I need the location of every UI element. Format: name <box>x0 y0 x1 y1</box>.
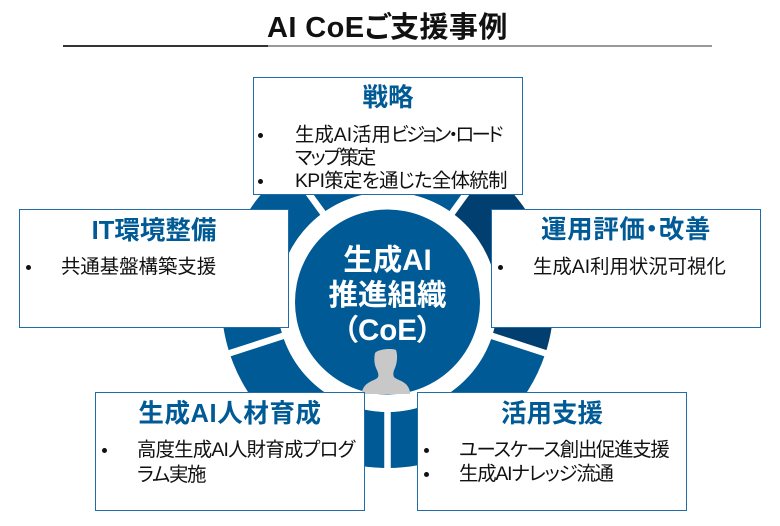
panel: IT environment <box>19 209 289 328</box>
title rule <box>63 45 712 46</box>
heading: strategy: 戦略 <box>362 84 414 112</box>
ring: dark segment <box>388 168 554 353</box>
bullet list: operations: 生成AI利用状況可視化 <box>533 256 726 278</box>
center circle <box>295 210 480 394</box>
title: AI CoEご支援事例 <box>267 12 508 44</box>
center label: （CoE） <box>343 314 432 347</box>
bullet list: utilization: ユースケース創出促進支援 <box>459 439 669 461</box>
heading: operations: 運用評価・改善 <box>541 216 711 244</box>
bullet list: utilization <box>424 439 670 485</box>
center label: 推進組織 <box>328 279 446 312</box>
bullet list: utilization: 生成AIナレッジ流通 <box>459 463 613 485</box>
heading: utilization: 活用支援 <box>501 400 603 428</box>
panel: operations <box>491 209 761 328</box>
heading: talent: 生成AI人材育成 <box>138 400 322 428</box>
bullet list: IT environment: 共通基盤構築支援 <box>61 256 216 278</box>
heading: IT environment: IT環境整備 <box>92 217 216 245</box>
bullet list: talent <box>102 439 356 486</box>
white inner disc and dividers <box>218 158 557 480</box>
bullet list: strategy: KPI策定を通じた全体統制 <box>295 170 507 192</box>
ring: blue segments <box>250 164 526 440</box>
icon: person <box>362 349 410 394</box>
bullet list: talent: ラム実施 <box>137 464 205 486</box>
panel: utilization <box>417 392 687 511</box>
center label <box>328 244 446 347</box>
bullet list: strategy: マップ策定 <box>295 147 374 169</box>
bullet list: talent: 高度生成AI人財育成プログ <box>137 439 354 461</box>
bullet list: strategy: 生成AI活用ビジョン・ロード <box>295 124 501 146</box>
panel: strategy <box>253 77 523 195</box>
center label: 生成AI <box>343 244 432 277</box>
panel: talent <box>95 392 365 511</box>
bullet list: strategy <box>258 124 507 192</box>
